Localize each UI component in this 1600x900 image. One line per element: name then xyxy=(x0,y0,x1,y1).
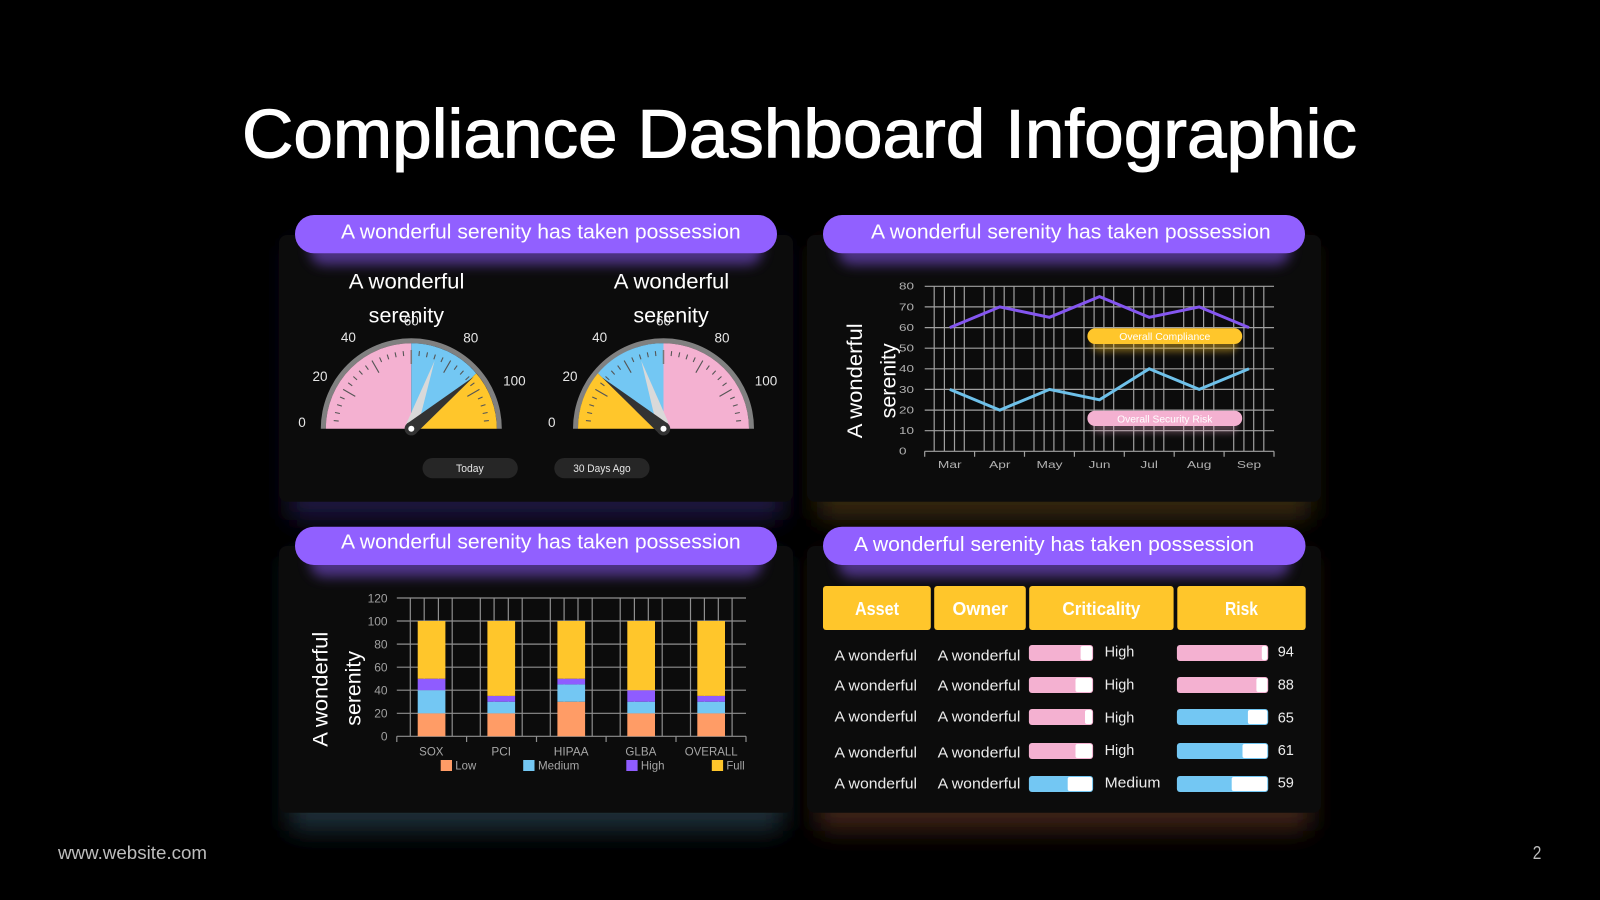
bar legend: Medium xyxy=(538,758,579,772)
x axis labels: Jul xyxy=(1140,460,1158,471)
table: risk values: 94 xyxy=(1278,644,1294,661)
y axis labels: 100 xyxy=(368,614,388,628)
panel: stacked bar chart xyxy=(279,527,793,831)
gauge scale right: 20 xyxy=(562,369,578,384)
gauge title left: A wonderful xyxy=(349,271,464,294)
gauge: today xyxy=(321,338,502,435)
x axis labels xyxy=(938,460,1262,471)
bar: SOX xyxy=(418,621,445,736)
heading: table: A wonderful serenity has taken possession xyxy=(854,533,1254,556)
heading: line chart: A wonderful serenity has taken possession xyxy=(871,220,1271,243)
bar: OVERALL xyxy=(697,621,725,736)
y axis title: bar chart: A wonderful xyxy=(310,632,332,747)
table: asset column: A wonderful xyxy=(834,744,917,761)
heading: table xyxy=(823,527,1306,565)
legend: overall security risk: Overall Security Risk xyxy=(1117,413,1213,425)
y axis labels: 40 xyxy=(899,364,915,375)
y axis labels: 80 xyxy=(899,282,915,293)
y axis labels: 0 xyxy=(381,730,388,744)
table: owner column: A wonderful xyxy=(938,744,1020,761)
table: asset column: A wonderful xyxy=(834,678,917,695)
gauge scale left: 0 xyxy=(298,415,306,430)
table: criticality labels: Medium xyxy=(1105,775,1160,792)
line chart xyxy=(899,282,1274,471)
table: owner column: A wonderful xyxy=(938,709,1020,726)
bar legend: Low xyxy=(455,758,477,772)
table: asset column: A wonderful xyxy=(834,648,917,665)
heading: bar chart xyxy=(295,527,777,565)
y axis labels: 0 xyxy=(899,447,907,458)
y axis labels: 40 xyxy=(374,684,388,698)
bar: HIPAA xyxy=(557,621,585,736)
bar legend: High xyxy=(641,758,664,772)
label: today: Today xyxy=(456,463,484,475)
table: criticality labels xyxy=(1105,644,1160,792)
table header: Asset xyxy=(855,599,899,619)
table: owner column: A wonderful xyxy=(938,648,1020,665)
heading: gauges xyxy=(295,215,777,253)
panel: line chart xyxy=(807,215,1321,520)
title: Compliance Dashboard Infographic xyxy=(242,96,1357,173)
x axis labels: May xyxy=(1036,460,1062,471)
footer: website: www.website.com xyxy=(57,843,207,863)
y axis labels: 70 xyxy=(899,302,915,313)
gauge scale right: 40 xyxy=(592,330,607,345)
legend: overall security risk xyxy=(1087,411,1242,433)
table: risk values: 65 xyxy=(1278,709,1294,726)
table: criticality labels: High xyxy=(1105,677,1134,694)
gauge title right: serenity xyxy=(633,305,709,328)
table: risk values: 61 xyxy=(1278,742,1294,759)
table: asset column xyxy=(834,648,917,792)
table: criticality labels: High xyxy=(1105,644,1134,661)
bar chart xyxy=(368,591,746,772)
footer: page number: 2 xyxy=(1533,843,1541,863)
panel: gauges xyxy=(279,215,793,520)
gauge scale left xyxy=(298,314,526,430)
gauge scale right: 100 xyxy=(755,374,777,389)
y axis labels: 20 xyxy=(899,406,915,416)
x axis labels: Apr xyxy=(989,460,1011,471)
y axis title: line chart xyxy=(844,323,901,438)
x axis labels: OVERALL xyxy=(685,745,738,759)
table header: Risk xyxy=(1225,599,1259,619)
x axis labels: Sep xyxy=(1237,460,1262,471)
y axis title: bar chart: serenity xyxy=(343,650,366,726)
gauge scale right xyxy=(548,314,777,430)
table: risk values: 59 xyxy=(1278,775,1294,792)
table: asset column: A wonderful xyxy=(834,709,917,726)
gauge title left: serenity xyxy=(369,305,445,328)
bar legend xyxy=(441,758,745,772)
table: criticality labels: High xyxy=(1105,709,1134,726)
table: risk bars xyxy=(1177,645,1268,792)
y axis labels xyxy=(899,282,915,458)
x axis labels: SOX xyxy=(419,745,443,759)
y axis labels: 80 xyxy=(374,637,388,651)
gauge scale right: 0 xyxy=(548,415,555,430)
table: criticality labels: High xyxy=(1105,742,1134,759)
x axis labels: Mar xyxy=(938,460,963,471)
legend: overall compliance xyxy=(1087,328,1242,352)
gauge scale right: 80 xyxy=(714,331,730,346)
table header: Owner xyxy=(952,599,1008,619)
label: 30 days ago: 30 Days Ago xyxy=(573,463,631,475)
gauge title right: A wonderful xyxy=(614,271,729,294)
y axis title: line chart: serenity xyxy=(878,343,901,418)
y axis labels: 60 xyxy=(374,660,388,674)
x axis labels: HIPAA xyxy=(554,745,589,759)
gauge scale left: 80 xyxy=(463,331,478,346)
x axis labels: Jun xyxy=(1088,460,1110,471)
y axis labels: 60 xyxy=(899,323,915,334)
series: blue line xyxy=(950,369,1249,410)
heading: line chart xyxy=(823,215,1305,253)
y axis title: bar chart xyxy=(310,632,366,747)
y axis title: line chart: A wonderful xyxy=(844,323,867,438)
heading: bar chart: A wonderful serenity has taken possession xyxy=(341,530,741,553)
table: risk values xyxy=(1278,644,1294,792)
table: owner column: A wonderful xyxy=(938,678,1020,695)
y axis labels: 120 xyxy=(368,591,388,605)
label: 30 days ago xyxy=(554,458,650,478)
y axis labels: 30 xyxy=(899,385,915,396)
label: today xyxy=(422,458,518,478)
table: owner column: A wonderful xyxy=(938,775,1020,792)
gauge title left xyxy=(349,271,464,328)
table: owner column xyxy=(938,648,1020,792)
legend: overall compliance: Overall Compliance xyxy=(1119,331,1210,343)
table header xyxy=(823,586,1306,630)
panel: table xyxy=(807,527,1321,831)
y axis labels: 20 xyxy=(374,707,388,721)
gauge scale left: 20 xyxy=(312,369,328,384)
y axis labels: 10 xyxy=(899,426,915,437)
table: asset column: A wonderful xyxy=(834,775,917,792)
gauge: 30 days ago xyxy=(573,338,754,435)
table: risk values: 88 xyxy=(1278,677,1294,694)
gauge scale right: 60 xyxy=(656,314,671,329)
series: purple line xyxy=(950,297,1249,328)
bar: GLBA xyxy=(627,621,655,736)
table: criticality bars xyxy=(1029,645,1093,792)
x axis labels xyxy=(419,745,738,759)
x axis labels: GLBA xyxy=(625,745,656,759)
gauge scale left: 40 xyxy=(341,330,356,345)
y axis labels xyxy=(368,591,388,744)
gauge scale left: 100 xyxy=(503,374,526,389)
gauge title right xyxy=(614,271,729,328)
y axis labels: 50 xyxy=(899,344,915,355)
x axis labels: PCI xyxy=(491,745,511,759)
gauge scale left: 60 xyxy=(404,314,419,329)
bar: PCI xyxy=(487,621,515,736)
bar legend: Full xyxy=(726,758,745,772)
heading: gauges: A wonderful serenity has taken possession xyxy=(341,220,741,243)
table header: Criticality xyxy=(1062,599,1140,619)
x axis labels: Aug xyxy=(1187,460,1211,471)
